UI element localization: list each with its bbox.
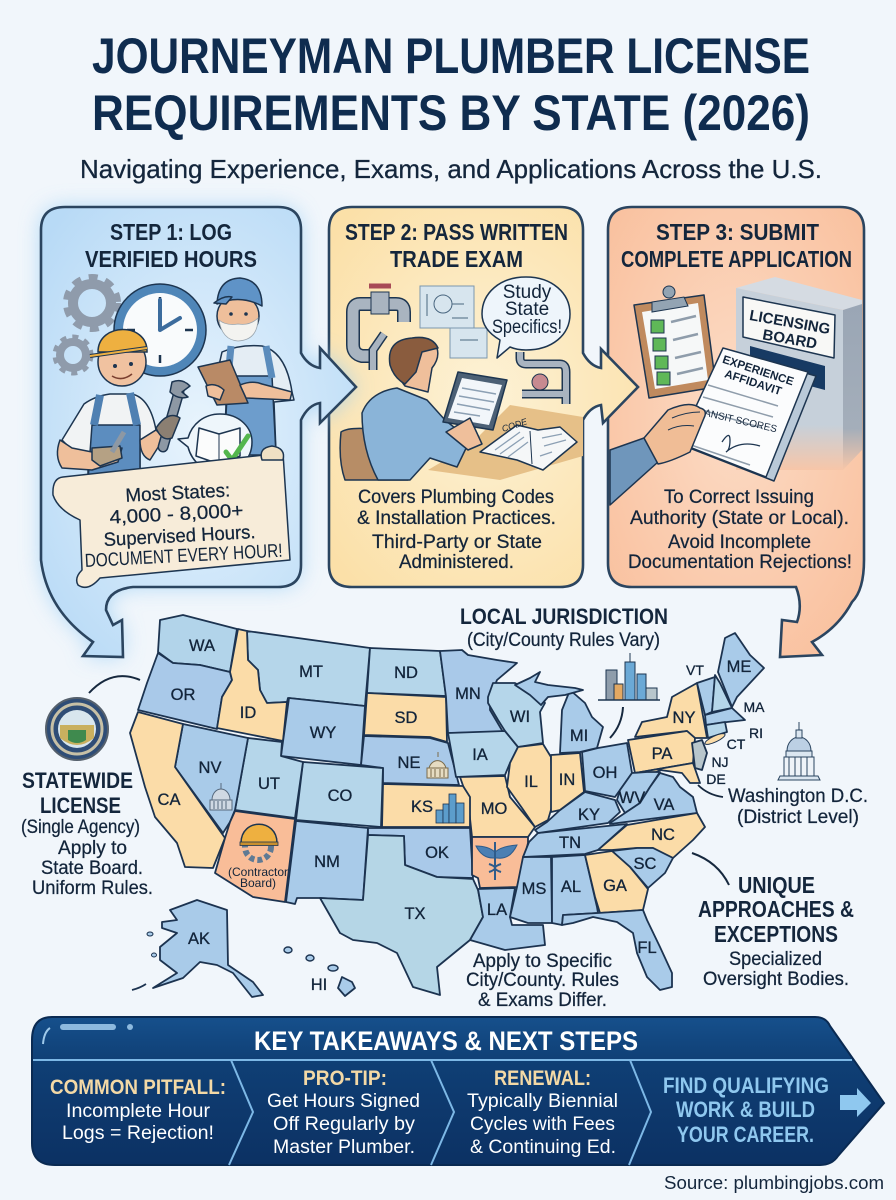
icon: code book [480,416,577,470]
state labels: FL [637,939,657,957]
icon: city skyline [598,653,660,700]
unique approaches block: Specialized [729,949,822,970]
callout line: unique [692,853,729,885]
icon: Arizona hard hat and gear [240,824,278,860]
subtitle: Navigating Experience, Exams, and Applications Across the U.S. [80,154,822,184]
scroll text: DOCUMENT EVERY HOUR! [84,541,283,572]
unique approaches block: Oversight Bodies. [703,969,849,990]
state labels: IL [524,773,538,791]
local apply text: Apply to Specific [473,951,612,972]
icon: washington capitol [778,722,820,780]
local jurisdiction block [460,604,668,651]
icon: student at tablet [362,337,507,480]
call to action: WORK & BUILD [676,1097,815,1122]
state labels: MO [481,800,507,818]
state labels [158,637,765,994]
statewide license block: Uniform Rules. [32,878,153,899]
panel: step 2 [329,207,638,587]
scroll text: 4,000 - 8,000+ [109,501,244,529]
step 3 body text [628,487,852,573]
icon: gears [55,277,118,373]
state labels: NC [651,826,675,844]
state labels: MT [299,663,323,681]
speech bubble: study state specifics: Specifics! [492,317,562,338]
Arizona label: contractor board: (Contractor [228,865,288,879]
step 2 body text: Covers Plumbing Codes [358,487,554,508]
state labels: SD [395,709,418,727]
call to action: FIND QUALIFYING [663,1073,829,1098]
state: Alaska [132,900,263,997]
us map [130,615,764,997]
icon: licensing board box: LICENSING [748,307,831,338]
statewide license block: STATEWIDE [22,768,133,793]
icon: Kansas city skyline [436,794,464,823]
takeaway: pro-tip [267,1067,420,1158]
step 3 body text: To Correct Issuing [664,487,814,508]
state labels: UT [258,775,280,793]
icon: hand holding document [610,404,705,505]
state labels: ID [240,704,256,722]
icon: checklist clipboard [634,286,716,398]
state labels: CA [158,791,180,809]
state labels: RI [749,725,763,741]
unique approaches block: APPROACHES & [698,896,854,922]
takeaway: pro-tip: Master Plumber. [273,1137,415,1158]
icon: faucet pipes [353,286,404,370]
state labels: MA [744,699,765,715]
speech bubble: study state specifics: State [505,299,549,320]
state labels: AL [561,878,581,896]
step 1 heading: VERIFIED HOURS [85,246,257,272]
icon: state seal [46,698,108,760]
state labels: LA [487,901,507,919]
icon: logbook bubble [178,414,252,472]
state labels: VA [654,796,674,814]
icon: Arkansas caduceus [476,842,517,880]
step 3 body text: Documentation Rejections! [628,552,852,573]
unique approaches block [698,872,854,990]
state labels: WA [189,637,215,655]
unique approaches block: UNIQUE [738,872,815,898]
local apply text: City/County. Rules [466,970,619,991]
title: REQUIREMENTS BY STATE (2026) [92,85,810,141]
step 2 heading: TRADE EXAM [390,246,523,272]
icon: experience affidavit document: EXPERIENCE [721,354,795,388]
statewide license block: (Single Agency) [21,817,140,838]
state labels: DE [706,771,726,787]
callout line: DC [698,785,723,797]
icon: Nebraska capitol [427,752,448,778]
takeaway: renewal [467,1067,618,1158]
takeaway: renewal: Cycles with Fees [470,1114,615,1135]
icon: code book: CODE [501,416,529,434]
icon: experience affidavit document: AFFIDAVIT [723,368,783,398]
icon: desk [428,405,583,480]
state labels: OH [593,764,617,782]
icon: licensing board box: BOARD [761,326,819,353]
statewide license block: LICENSE [40,793,121,818]
state labels: ME [727,658,751,676]
step 2 body text: Third-Party or State [372,532,542,553]
state labels: GA [603,877,627,895]
banner: key takeaways [32,1017,884,1165]
icon: experience affidavit document: ANSIT SCORES [703,408,778,435]
local jurisdiction block: (City/County Rules Vary) [467,630,660,651]
state labels: OK [425,844,449,862]
scroll text [81,478,283,572]
banner dividers [33,1060,852,1165]
speech bubble: study state specifics: Study [503,282,552,303]
state labels: WY [310,724,336,742]
title [92,28,810,141]
local jurisdiction block: LOCAL JURISDICTION [460,604,668,629]
takeaway: common pitfall: COMMON PITFALL: [50,1076,226,1099]
figure: senior plumber with clipboard [198,278,294,455]
source: Source: plumbingjobs.com [664,1172,884,1193]
statewide license block: State Board. [41,858,143,879]
state labels: IA [472,746,488,764]
takeaway: renewal: & Continuing Ed. [470,1137,616,1158]
takeaway: renewal: Typically Biennial [467,1091,618,1112]
statewide license block: Apply to [58,838,127,859]
state labels: KS [411,798,433,816]
Arizona label: contractor board: Board) [240,876,276,890]
local apply text [466,951,619,1011]
state labels: IN [559,771,575,789]
state labels: PA [652,745,672,763]
state labels: SC [634,855,657,873]
step 2 heading: STEP 2: PASS WRITTEN [345,219,568,245]
icon: right arrow [840,1088,871,1117]
panel: step 1 glow [41,207,356,657]
local apply text: & Exams Differ. [478,990,607,1011]
takeaway: renewal: RENEWAL: [494,1067,591,1090]
takeaway: common pitfall: Incomplete Hour [66,1101,211,1122]
step 3 heading [621,219,852,272]
takeaway: common pitfall [50,1076,226,1144]
takeaway: pro-tip: Off Regularly by [273,1114,416,1135]
callout line: statewide [89,676,140,693]
lower 48 state shapes [130,615,764,995]
state labels: MS [522,880,546,898]
state labels: CT [727,736,746,752]
state labels: NY [673,709,695,727]
scroll text: Supervised Hours. [103,522,256,551]
takeaway: pro-tip: Get Hours Signed [267,1091,420,1112]
takeaway: pro-tip: PRO-TIP: [303,1067,387,1090]
state labels: OR [171,686,195,704]
statewide license block [21,768,153,899]
state labels: NJ [711,754,729,770]
icon: wrench [156,381,190,447]
state labels: TX [404,905,426,923]
takeaway: common pitfall: Logs = Rejection! [62,1123,214,1144]
scroll text: Most States: [125,480,231,507]
state labels: WV [619,789,645,807]
step 2 body text [357,487,556,573]
state labels: AK [188,930,210,948]
washington dc label [728,786,868,828]
speech bubble: study state specifics [482,277,570,358]
icon: licensing board box [736,277,862,470]
step 3 body text: Authority (State or Local). [630,508,849,529]
state labels: KY [578,806,600,824]
icon: blueprints [420,286,487,358]
state: Hawaii [284,947,355,996]
state labels: NV [199,759,221,777]
step 3 heading: STEP 3: SUBMIT [656,219,819,245]
scroll banner [53,446,290,587]
state labels: HI [311,976,327,994]
washington dc label: Washington D.C. [728,786,868,807]
state labels: MN [455,685,481,703]
Arizona label: contractor board [228,865,288,890]
state labels: WI [510,708,530,726]
icon: clock [114,284,206,376]
state labels: NE [398,754,420,772]
callout line: local [610,707,623,738]
washington dc label: (District Level) [737,807,859,828]
state labels: TN [559,834,581,852]
icon: Nevada capitol [210,783,232,810]
icon: chair [340,428,408,480]
state labels: VT [686,662,704,678]
state labels: ND [394,664,418,682]
step 2 body text: Administered. [399,552,514,573]
step 2 body text: & Installation Practices. [357,508,556,529]
state labels: CO [328,787,353,805]
banner heading: KEY TAKEAWAYS & NEXT STEPS [254,1026,638,1056]
state labels: NM [314,853,340,871]
unique approaches block: EXCEPTIONS [714,921,838,947]
step 1 heading [85,219,257,272]
panel: step 3 [608,207,864,657]
step 1 heading: STEP 1: LOG [110,219,232,245]
step 2 heading [345,219,568,272]
icon: right pipes [520,352,566,404]
state labels: MI [570,727,588,745]
icon: experience affidavit document [679,348,816,481]
step 3 body text: Avoid Incomplete [668,532,811,553]
panel: step 1 [41,207,356,657]
call to action [663,1073,829,1147]
call to action: YOUR CAREER. [677,1122,814,1147]
figure: young plumber in hard hat [57,330,164,480]
